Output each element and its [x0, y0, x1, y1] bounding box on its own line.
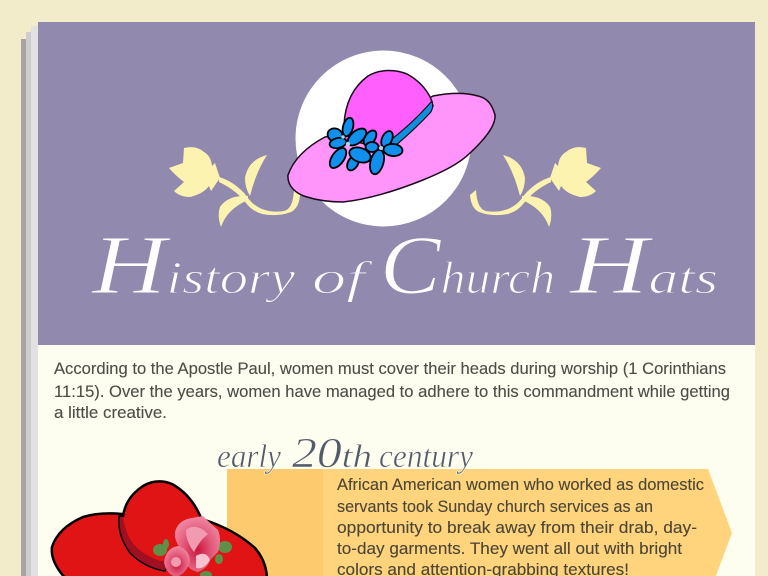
section text: to-day garments. They went all out with bright [337, 540, 682, 558]
title word: Church: Church [380, 219, 555, 312]
arrow banner [227, 469, 732, 576]
title word: History: H istory [91, 219, 296, 312]
heading word: century: century [379, 439, 473, 475]
icon: left floral ornament [169, 147, 300, 227]
section heading [217, 431, 473, 477]
stacked paper layers [21, 26, 41, 576]
intro paragraph [54, 360, 730, 422]
roses [164, 516, 220, 576]
section text: servants took Sunday church services as an [337, 498, 653, 516]
page body panel [38, 345, 755, 576]
intro paragraph: a little creative. [54, 404, 167, 422]
icon: pink hat with blue flowers [288, 70, 495, 202]
title word: of: of [312, 252, 374, 303]
header panel [38, 22, 755, 345]
section text [337, 476, 704, 576]
crown outline [123, 481, 202, 520]
flower centres [341, 135, 383, 150]
leaves [153, 539, 232, 576]
hat brim [288, 93, 495, 202]
heading word: 20th: 20th [292, 431, 372, 477]
heading word: early: early [217, 439, 281, 475]
icon: right floral ornament [470, 147, 601, 227]
title word: Hats: H ats [569, 219, 718, 312]
intro paragraph: According to the Apostle Paul, women must cover their heads during worship (1 Corinthians [54, 360, 726, 378]
red crown [123, 481, 202, 561]
icon: white circle behind hat [296, 50, 472, 226]
icon: red hat with roses [52, 481, 267, 576]
section text: opportunity to break away from their drab, day- [337, 519, 697, 537]
section text: African American women who worked as domestic [337, 476, 704, 494]
blue ribbon [388, 101, 433, 146]
title [91, 219, 718, 312]
intro paragraph: 11:15). Over the years, women have managed to adhere to this commandment while getting [54, 383, 730, 401]
hat crown [344, 70, 433, 148]
dark ribbon [119, 516, 172, 571]
red brim [52, 513, 267, 576]
blue flowers [326, 117, 403, 176]
